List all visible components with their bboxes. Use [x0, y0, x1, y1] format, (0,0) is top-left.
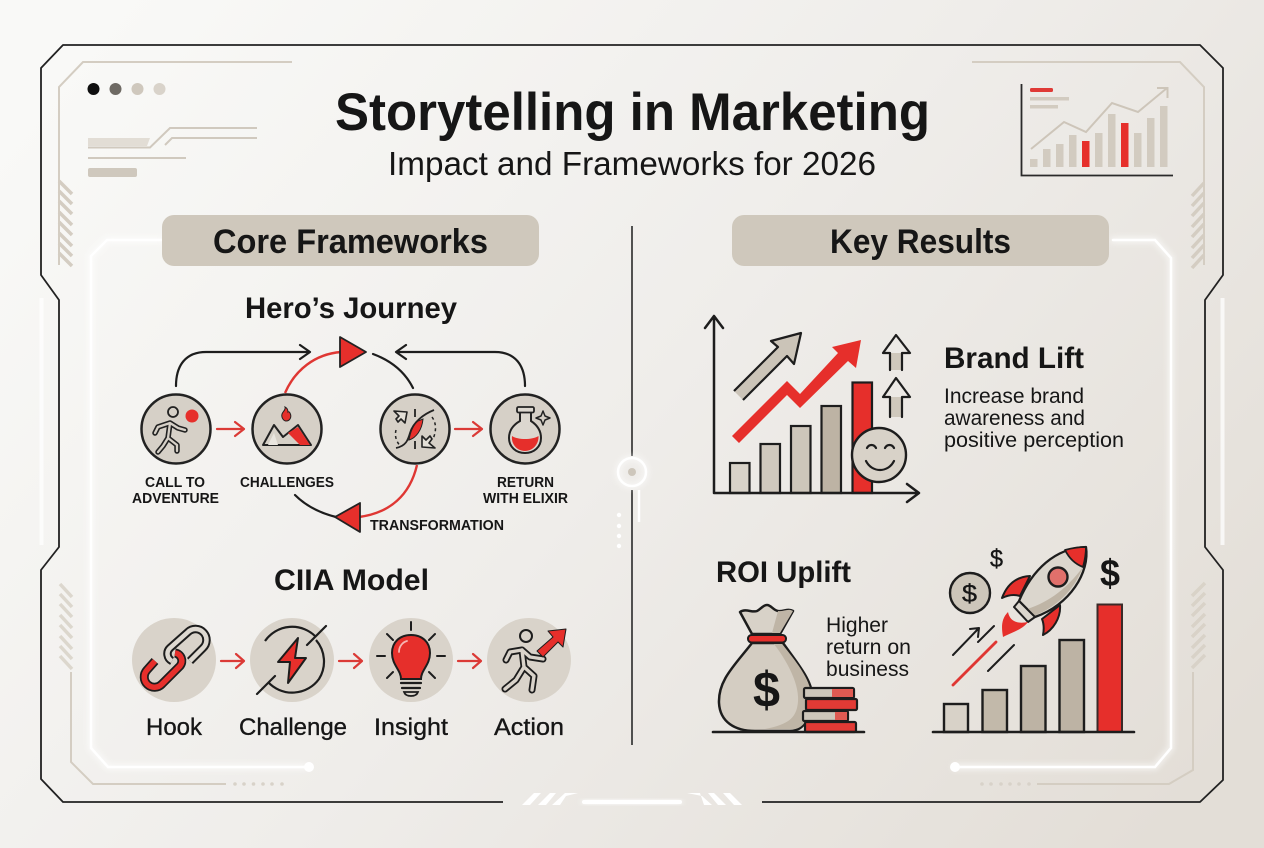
heading pill: key results: Key Results [830, 223, 1011, 261]
text: roi description [826, 613, 911, 681]
text: brand lift: Brand Lift [944, 342, 1084, 375]
center divider [617, 226, 646, 745]
arrow [217, 422, 244, 436]
text: roi description: business [826, 657, 909, 681]
icon: money bag: $ [753, 662, 780, 718]
chart: roi bars [933, 604, 1134, 732]
step: challenge [239, 618, 347, 741]
decorative dots and bars, top left [88, 83, 257, 177]
mini chart, top right [1022, 84, 1173, 176]
step: challenges [252, 394, 322, 464]
arrow [221, 654, 244, 668]
panel: brand lift [705, 316, 1124, 502]
step: insight [369, 618, 453, 741]
icon: rocket [1002, 547, 1087, 637]
step: action: Action [494, 714, 564, 741]
icon: dollar signs [950, 545, 1120, 613]
arrow [339, 654, 362, 668]
icon: dollar signs: $ [990, 545, 1003, 573]
text: brand lift: Increase brand [944, 384, 1084, 408]
arrows: double up [883, 335, 910, 417]
text: brand lift: awareness and [944, 406, 1085, 430]
step: challenge: Challenge [239, 714, 347, 741]
step labels: WITH ELIXIR [483, 491, 568, 507]
arrow [455, 422, 482, 436]
heading pill: key results [732, 215, 1109, 266]
icon: money bag [713, 605, 864, 732]
step: transformation [380, 394, 450, 464]
panel: ciia model [132, 564, 571, 741]
step: action [487, 618, 571, 741]
icon: smiley [852, 428, 906, 482]
icon: coin stack [803, 688, 857, 732]
heading: hero's journey: Hero’s Journey [245, 292, 457, 325]
heading pill: core frameworks [162, 215, 539, 266]
heading pill: core frameworks: Core Frameworks [213, 223, 488, 261]
title: Storytelling in Marketing [335, 83, 930, 142]
step labels [132, 475, 568, 534]
icon: dollar signs: $ [962, 580, 977, 608]
chart: brand lift bars [705, 316, 919, 502]
step labels: RETURN [497, 475, 554, 491]
text: brand lift: positive perception [944, 428, 1124, 452]
step: hook [132, 618, 216, 741]
step: call to adventure [142, 394, 210, 464]
icon: dollar signs: $ [1100, 553, 1120, 595]
step: hook: Hook [146, 714, 203, 741]
arrow [458, 654, 481, 668]
step labels: CHALLENGES [240, 475, 334, 491]
panel: roi uplift [713, 545, 1134, 732]
arrow: red growth [732, 340, 861, 443]
step: return with elixir [490, 394, 560, 464]
heading: roi uplift: ROI Uplift [716, 556, 851, 589]
panel: hero's journey [132, 292, 568, 534]
bottom glow bars [522, 793, 742, 805]
text: roi description: Higher [826, 613, 888, 637]
journey cycle arrows [176, 337, 525, 532]
arrow: grey up [734, 333, 801, 400]
step labels: TRANSFORMATION [370, 518, 504, 534]
text: roi description: return on [826, 635, 911, 659]
subtitle: Impact and Frameworks for 2026 [388, 145, 876, 182]
step labels: CALL TO [145, 475, 205, 491]
inner tan frame [59, 62, 1205, 784]
white panel outlines [42, 240, 1222, 786]
text: brand lift [944, 342, 1124, 452]
icon: speed lines [953, 626, 1014, 685]
heading: ciia model: CIIA Model [274, 564, 429, 597]
step: insight: Insight [374, 714, 448, 741]
step labels: ADVENTURE [132, 491, 219, 507]
